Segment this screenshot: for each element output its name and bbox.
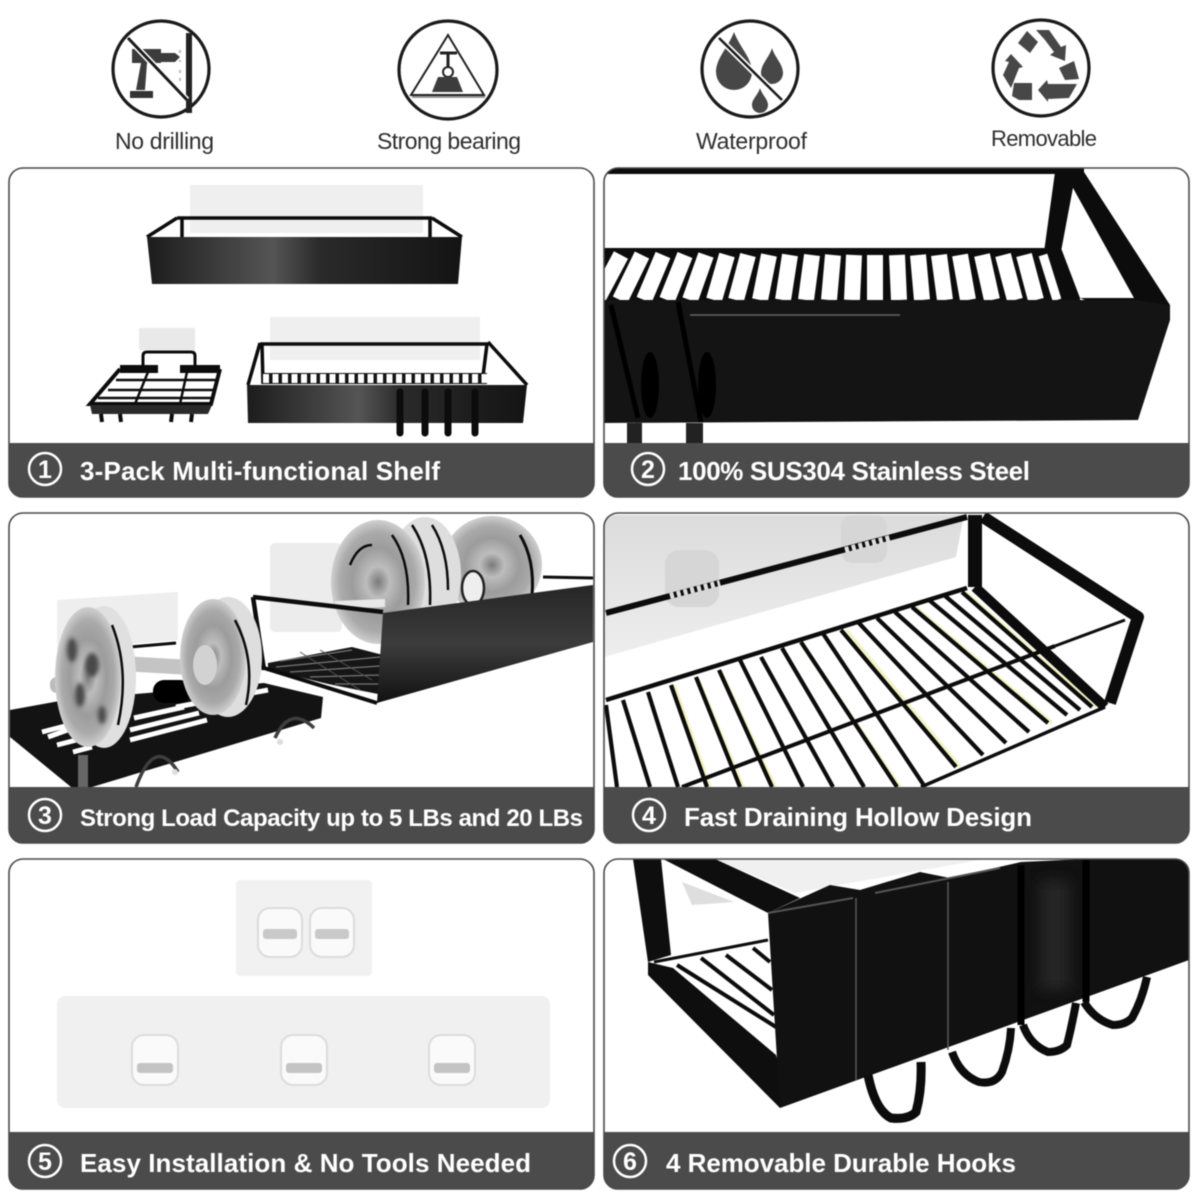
shelf with frame and slats	[633, 859, 1189, 1108]
caption bar 6: 6	[623, 1148, 637, 1176]
shelf frame	[606, 515, 1138, 707]
wide shelf with hooks	[247, 317, 527, 433]
caption bar 5: 5	[38, 1148, 52, 1176]
small adhesive plate	[236, 880, 372, 976]
label: waterproof: Waterproof	[696, 128, 808, 154]
icon: strong bearing	[399, 21, 497, 119]
long adhesive plate	[57, 996, 550, 1108]
caption bar 5: Easy Installation & No Tools Needed	[80, 1148, 531, 1178]
label: removable: Removable	[991, 126, 1097, 151]
panel: load capacity with dumbbells	[9, 513, 594, 843]
panel: easy installation	[9, 859, 594, 1189]
panel: draining hollow design	[604, 513, 1189, 843]
caption bar 4: Fast Draining Hollow Design	[684, 802, 1032, 832]
adhesive plate and hooks	[604, 515, 964, 657]
left shelf with small dumbbell	[10, 592, 323, 787]
caption bar 2: 100% SUS304 Stainless Steel	[678, 456, 1030, 486]
icon row	[113, 20, 1097, 154]
label: strong bearing: Strong bearing	[377, 128, 521, 154]
steel frame and slats	[604, 168, 1170, 306]
small soap shelf	[90, 328, 220, 422]
icon: removable recycle arrows	[993, 20, 1089, 116]
label: no drilling: No drilling	[115, 128, 214, 154]
caption bar 4	[604, 787, 1189, 843]
caption bar 6	[604, 1132, 1189, 1189]
caption bar 1: 3-Pack Multi-functional Shelf	[80, 456, 440, 486]
right shelf with large dumbbell	[253, 516, 593, 703]
drain wires	[606, 588, 1105, 787]
caption bar 4: 4	[642, 802, 656, 830]
panel: removable durable hooks	[604, 859, 1189, 1189]
caption bar 3: Strong Load Capacity up to 5 LBs and 20 LBs	[80, 805, 583, 832]
icon: no drilling	[113, 21, 209, 117]
caption bar 3: 3	[38, 802, 52, 830]
caption bar 5	[9, 1132, 594, 1189]
caption bar 2: 2	[641, 456, 655, 484]
caption bar 1	[9, 443, 594, 497]
shelf front face with hooks	[604, 300, 1170, 443]
caption bar 1: 1	[38, 456, 52, 484]
caption bar 3	[9, 787, 594, 843]
panel: stainless steel close-up	[597, 167, 1189, 497]
caption bar 2	[604, 443, 1189, 497]
panel: 3-pack multi-functional shelf	[9, 168, 594, 497]
hooks	[868, 977, 1147, 1118]
caption bar 6: 4 Removable Durable Hooks	[666, 1148, 1016, 1178]
top long shelf	[147, 185, 462, 284]
icon: waterproof	[702, 21, 798, 117]
